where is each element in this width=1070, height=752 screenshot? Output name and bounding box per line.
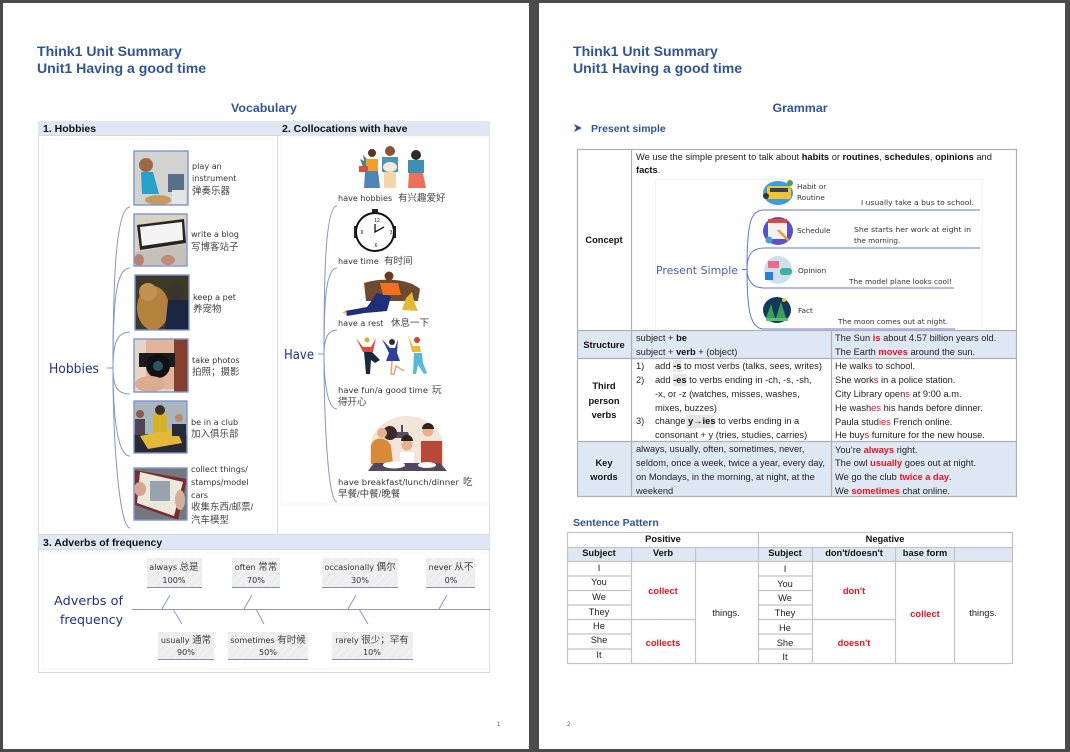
labels: categories: Habit or <box>797 182 826 191</box>
concept text: We use the simple present to talk about habits or routines, schedules, opinions and <box>636 152 992 162</box>
label: have breakfast: 早餐/中餐/晚餐 <box>338 488 401 500</box>
tag: never: never 从不 <box>429 562 474 573</box>
structure rules <box>636 333 737 357</box>
positive subjects <box>589 563 610 660</box>
negative subjects: I <box>784 564 786 574</box>
positive subjects: He <box>593 621 605 631</box>
label: be in a club: 加入俱乐部 <box>191 428 239 440</box>
tag: never <box>426 558 475 588</box>
label: have breakfast: have breakfast/lunch/dinner <box>338 477 460 487</box>
verbs: collect <box>910 609 940 619</box>
structure examples <box>835 333 996 357</box>
third person rules: mixes, buzzes) <box>655 403 717 413</box>
verbs: collect <box>648 586 678 596</box>
tag: always: always 总是 <box>149 561 199 573</box>
tag: never: 0% <box>445 575 458 585</box>
fishbone spine <box>132 595 490 624</box>
negative subjects: You <box>777 579 793 589</box>
label: collect things: 汽车模型 <box>191 514 230 526</box>
tag: sometimes <box>228 632 308 660</box>
key words list: weekend <box>635 486 673 496</box>
have mind-map branches <box>318 206 337 502</box>
labels: example sentences: I usually take a bus to school. <box>861 198 974 207</box>
tag: occasionally: 30% <box>351 575 369 585</box>
positive subjects: She <box>591 635 607 645</box>
icon: three people with hobbies <box>359 146 426 188</box>
title: page 2: Unit1 Having a good time <box>573 60 742 76</box>
heading: collocations: 2. Collocations with have <box>282 123 408 135</box>
third person rules: -x, or -z (watches, misses, washes, <box>655 389 800 399</box>
label: keep a pet <box>193 292 236 315</box>
heading: adverbs: 3. Adverbs of frequency <box>43 537 162 549</box>
panel: page 1 <box>3 3 529 749</box>
concept text line 2: facts. <box>636 165 660 175</box>
label: be in a club: be in a club <box>191 417 238 427</box>
tag: rarely <box>332 632 413 660</box>
verbs: things. <box>712 608 740 618</box>
label: have a rest <box>338 317 429 329</box>
labels: example sentences: She starts her work at eight in <box>854 225 971 234</box>
labels: example sentences <box>837 198 974 326</box>
third person rules: add -es to verbs ending in -ch, -s, -sh, <box>655 375 812 385</box>
verbs <box>646 586 997 648</box>
third person examples: He washes his hands before dinner. <box>835 403 983 413</box>
label: take photos: take photos <box>192 355 240 365</box>
third person rules: 1) <box>636 361 644 371</box>
page number 1: 1 <box>497 722 501 728</box>
column headers: base form <box>903 548 947 558</box>
icon: schedule <box>763 217 793 245</box>
third person rules: add -s to most verbs (talks, sees, writes) <box>655 361 822 371</box>
key words examples: The owl usually goes out at night. <box>835 458 976 468</box>
label: have breakfast <box>338 476 473 500</box>
negative subjects: She <box>777 638 793 648</box>
negative subjects: We <box>778 593 792 603</box>
adverbs root label: Adverbs of <box>54 594 123 609</box>
heading: sentence pattern: Sentence Pattern <box>573 517 659 529</box>
labels: example sentences: The moon comes out at night. <box>837 317 948 326</box>
tag: often: often 常常 <box>235 561 277 573</box>
third person examples: She works in a police station. <box>835 375 955 385</box>
hobbies mind-map branches <box>107 207 130 528</box>
label: have hobbies <box>338 192 446 204</box>
label: have hobbies: have hobbies <box>338 193 392 203</box>
photo: take photos <box>134 339 188 392</box>
table grid <box>577 149 1017 497</box>
verbs: collects <box>646 638 680 648</box>
column headers <box>582 548 947 558</box>
key words examples: We go the club twice a day. <box>835 472 952 482</box>
table header fill <box>567 547 1013 561</box>
key words examples <box>835 445 976 496</box>
third person examples: He walks to school. <box>835 361 915 371</box>
column headers: don't/doesn't <box>825 548 883 558</box>
row label: third person verbs: person <box>588 396 620 406</box>
structure rules: subject + verb + (object) <box>636 347 737 357</box>
label: collect things: stamps/model <box>191 477 249 487</box>
table row fills <box>577 330 1017 497</box>
positive subjects: They <box>589 607 610 617</box>
title: page 1: Unit1 Having a good time <box>37 60 206 76</box>
row label: third person verbs <box>588 381 620 420</box>
label: play an instrument <box>192 161 236 197</box>
row label: structure: Structure <box>583 340 625 350</box>
heading: hobbies: 1. Hobbies <box>43 123 96 135</box>
positive subjects: You <box>591 577 607 587</box>
third person examples: City Library opens at 9:00 a.m. <box>835 389 962 399</box>
label: have time <box>338 255 413 267</box>
label: keep a pet: keep a pet <box>193 292 236 302</box>
label: have hobbies: 有兴趣爱好 <box>398 192 446 204</box>
labels: categories: Schedule <box>797 226 831 235</box>
label: collect things: 收集东西/邮票/ <box>191 501 254 513</box>
icon: dancing people <box>356 335 427 374</box>
panel: adverbs of frequency <box>38 535 490 672</box>
label: play an instrument: instrument <box>192 173 236 183</box>
photo: write a blog <box>134 214 187 266</box>
heading: grammar: Grammar <box>772 101 828 115</box>
heading: adverbs <box>38 535 490 549</box>
verbs: doesn't <box>838 638 870 648</box>
structure rules: subject + be <box>636 333 687 343</box>
label: have a rest: 休息一下 <box>391 317 429 329</box>
label: have fun: have fun/a good time <box>338 385 428 395</box>
photo: play an instrument <box>134 151 188 205</box>
icon: clock: 12 <box>374 218 380 224</box>
label: have time: 有时间 <box>384 255 413 267</box>
have root label: Have <box>284 348 314 363</box>
label: have fun <box>338 385 442 408</box>
negative subjects: They <box>775 608 796 618</box>
positive subjects: We <box>592 592 606 602</box>
grammar table <box>577 149 1017 497</box>
labels: categories: Opinion <box>798 266 826 275</box>
key words list: on Mondays, in the morning, at night, at the <box>636 472 815 482</box>
verbs: things. <box>969 608 997 618</box>
sentence pattern table <box>567 532 1013 664</box>
icon: opinion <box>764 256 792 284</box>
heading: hobbies <box>38 121 277 135</box>
third person examples: He buys furniture for the new house. <box>835 430 985 440</box>
third person rules: 3) <box>636 416 644 426</box>
icon: bus <box>763 180 793 205</box>
present simple diagram <box>656 180 982 330</box>
page number 2: 2 <box>567 722 571 728</box>
heading: present simple: Present simple <box>591 123 666 135</box>
tag: often: 70% <box>247 575 265 585</box>
row label: concept: Concept <box>585 235 623 245</box>
label: have breakfast: 吃 <box>463 476 473 488</box>
label: collect things <box>191 464 254 526</box>
heading: vocabulary: Vocabulary <box>231 101 297 115</box>
heading: collocations <box>277 121 490 135</box>
column headers: Subject <box>582 548 616 558</box>
label: keep a pet: 养宠物 <box>193 303 222 315</box>
tag: rarely: 10% <box>363 647 381 657</box>
icon: fact <box>763 297 791 323</box>
key words list: always, usually, often, sometimes, never, <box>636 444 804 454</box>
third person rules <box>636 360 822 440</box>
positive subjects: It <box>596 650 602 660</box>
key words examples: You’re always right. <box>835 445 917 455</box>
column headers: Verb <box>653 548 673 558</box>
photo: be in a club <box>134 401 187 453</box>
structure examples: The Earth moves around the sun. <box>835 347 975 357</box>
key words examples: We sometimes chat online. <box>835 486 950 496</box>
third person rules: consonant + y (tries, studies, carries) <box>655 430 807 440</box>
third person examples: Paula studies French online. <box>835 417 952 427</box>
panel: hobbies <box>38 121 278 534</box>
label: have a rest: have a rest <box>338 318 383 328</box>
tag: rarely: rarely 很少；罕有 <box>335 634 409 646</box>
photo: collect things <box>134 468 187 520</box>
negative subjects: He <box>779 623 791 633</box>
adverbs root label: frequency <box>60 613 123 628</box>
icon: clock: 6 <box>375 243 378 249</box>
icon: person resting <box>342 272 420 316</box>
icon: clock: 9 <box>361 230 364 236</box>
labels: categories <box>797 182 831 315</box>
hobbies root label: Hobbies <box>49 362 99 377</box>
tag: usually: 90% <box>177 647 195 657</box>
label: take photos: 拍照；摄影 <box>192 366 240 378</box>
tag: always: 100% <box>162 575 186 585</box>
label: have fun: 玩 <box>432 385 442 396</box>
label: have fun: 得开心 <box>338 396 367 408</box>
tag: sometimes: sometimes 有时候 <box>230 634 306 646</box>
label: play an instrument: 弹奏乐器 <box>192 185 231 197</box>
key words list: seldom, once a week, twice a year, every day, <box>636 458 825 468</box>
structure examples: The Sun is about 4.57 billion years old. <box>835 333 996 343</box>
tag: often <box>232 558 280 588</box>
labels: categories: Fact <box>798 306 813 315</box>
label: collect things: cars <box>191 490 208 500</box>
row label: key words <box>589 458 618 482</box>
row label: key words: words <box>589 472 618 482</box>
third person rules: change y→ies to verbs ending in a <box>655 416 800 426</box>
label: write a blog: 写博客站子 <box>191 241 239 253</box>
labels: example sentences: The model plane looks cool! <box>848 277 952 286</box>
icon: clock: 3 <box>390 230 393 236</box>
present simple diagram: Present Simple <box>656 264 738 277</box>
label: have time: have time <box>338 256 379 266</box>
verbs: don't <box>843 586 865 596</box>
tag: usually: usually 通常 <box>161 634 211 646</box>
tag: usually <box>158 632 214 660</box>
icon: family dinner <box>368 416 447 471</box>
labels: example sentences: the morning. <box>854 236 900 245</box>
label: play an instrument: play an <box>192 161 222 171</box>
panel: collocations with have <box>277 121 490 534</box>
title: page 2: Think1 Unit Summary <box>573 43 718 59</box>
third person examples <box>835 361 985 440</box>
header: positive and negative: Positive <box>645 534 681 544</box>
negative subjects <box>775 564 796 662</box>
label: take photos <box>192 355 240 378</box>
tag: occasionally: occasionally 偶尔 <box>324 561 396 573</box>
column headers: Subject <box>768 548 802 558</box>
panel: page 2 <box>539 3 1065 749</box>
tag: sometimes: 50% <box>259 647 277 657</box>
header: positive and negative <box>645 534 904 544</box>
tag: occasionally <box>322 558 398 588</box>
negative subjects: It <box>782 652 788 662</box>
label: collect things: collect things/ <box>191 464 248 474</box>
third person rules: 2) <box>636 375 644 385</box>
adverbs root label <box>54 594 123 628</box>
title: page 1: Think1 Unit Summary <box>37 43 182 59</box>
icon: clock <box>355 209 395 251</box>
row label: third person verbs: verbs <box>592 410 616 420</box>
header: positive and negative: Negative <box>866 534 904 544</box>
photo: keep a pet <box>135 275 189 330</box>
key words list <box>635 444 825 496</box>
label: be in a club <box>191 417 239 440</box>
tag: always <box>147 558 202 588</box>
row label: key words: Key <box>595 458 613 468</box>
label: write a blog: write a blog <box>191 229 239 239</box>
title: page 1 <box>37 43 206 76</box>
label: write a blog <box>191 229 239 253</box>
row label: third person verbs: Third <box>592 381 616 391</box>
positive subjects: I <box>598 563 600 573</box>
labels: categories: Routine <box>797 193 825 202</box>
table grid <box>567 532 1013 664</box>
title: page 2 <box>573 43 742 76</box>
